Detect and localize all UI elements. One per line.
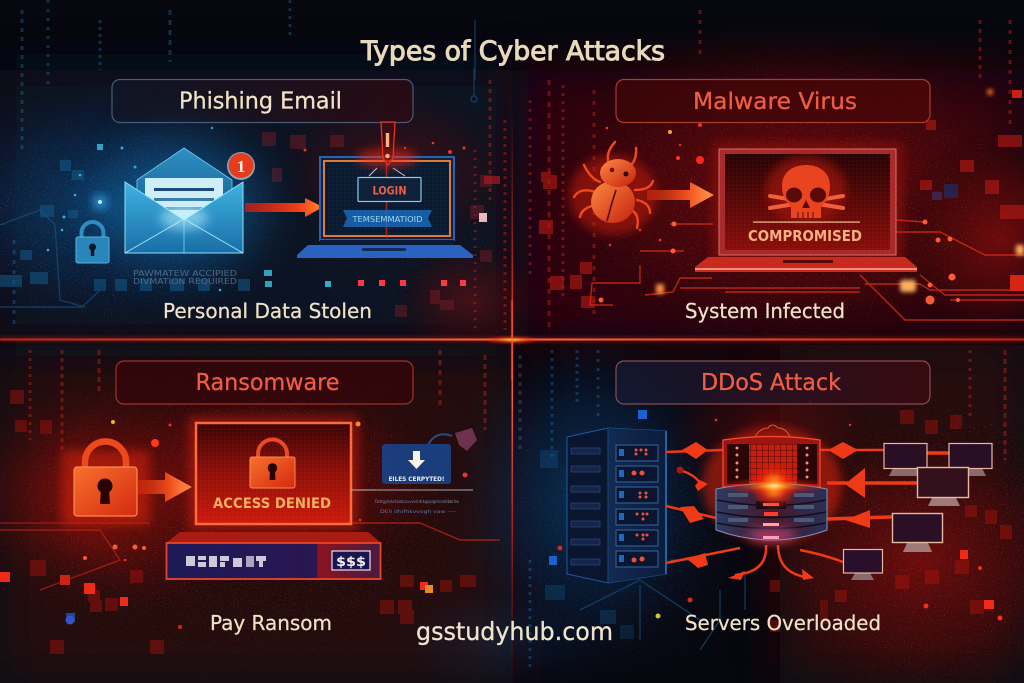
footer: website: gsstudyhub.com [416, 617, 613, 646]
encrypted file details: DEII dhifhkvvogh vaw ---- [380, 509, 457, 515]
icon: large red padlock [62, 442, 150, 525]
login box: LOGIN [372, 184, 406, 198]
icon: alert marker [357, 122, 417, 167]
encrypted file details [350, 490, 473, 515]
icon: attacking monitor 1 [884, 444, 927, 476]
icon: attacking monitor 4 [892, 514, 942, 552]
horizontal divider [0, 300, 1024, 380]
panel: malware virus [569, 80, 930, 323]
icon: compromised laptop [695, 142, 917, 272]
arrow: bug to laptop [647, 182, 714, 208]
heading: ransomware: Ransomware [196, 370, 340, 396]
vertical divider [512, 105, 513, 683]
pixelated ransom note [186, 556, 266, 567]
icon: attacking monitor 2 [949, 444, 992, 476]
small caption: information required: PAWMATEW ACCIPIED [133, 269, 237, 278]
small caption line two: DIVMATION REQUIRED [133, 277, 237, 286]
panel: ransomware [62, 361, 477, 635]
encrypted file details: Dstrgyhskvteobcsvvved drkgoprgdsrvddbbrlae [375, 499, 459, 505]
icon: laptop with login screen [297, 157, 473, 258]
ransom amount [332, 551, 370, 570]
background: glows and particles [47, 89, 1024, 629]
icon: server tower [567, 428, 666, 583]
ransom amount: $$$ [336, 554, 366, 570]
icon: open envelope with letter [104, 140, 264, 270]
caption: servers overloaded: Servers Overloaded [685, 611, 881, 635]
icon: ransom payment panel [166, 532, 381, 580]
icon: blue padlock [76, 222, 109, 263]
panel: phishing email [76, 80, 473, 323]
label: access denied: ACCESS DENIED [213, 496, 331, 512]
icon: overloaded central server [702, 425, 842, 543]
heading: ddos attack [616, 361, 930, 404]
login box [358, 178, 421, 202]
arrow: envelope to laptop [245, 198, 323, 217]
notification badge: 1 [237, 157, 245, 176]
heading: ransomware [116, 361, 413, 404]
server rack units [616, 445, 658, 567]
heading: phishing email: Phishing Email [179, 88, 342, 114]
caption: personal data stolen: Personal Data Stolen [163, 299, 372, 323]
icon: bug [569, 142, 657, 235]
icon: skull and crossbones [766, 156, 846, 224]
heading: malware virus: Malware Virus [693, 89, 857, 115]
heading: phishing email [112, 80, 413, 122]
login field banner: TEMSEMMATIOID [351, 215, 422, 224]
title: Types of Cyber Attacks [360, 36, 665, 67]
caption: system infected: System Infected [685, 299, 845, 323]
panel: ddos attack [567, 361, 992, 635]
heading: malware virus [616, 80, 930, 122]
notification badge [227, 152, 255, 180]
label: compromised: COMPROMISED [748, 227, 862, 245]
icon: files encrypted card [382, 428, 477, 484]
icon: files encrypted card: EILES CERPYTED! [388, 475, 445, 483]
icon: attacking monitor 3 [918, 468, 968, 506]
caption: pay ransom: Pay Ransom [210, 611, 332, 635]
icon: small padlock [250, 440, 295, 488]
icon: attacking monitor 5 [844, 550, 882, 580]
heading: ddos attack: DDoS Attack [701, 370, 842, 396]
login field banner [343, 210, 432, 227]
arrows: attack traffic [666, 442, 950, 580]
server left-face vents [571, 448, 600, 565]
icon: access denied screen [188, 416, 359, 532]
arrow: padlock to screen [138, 472, 192, 502]
